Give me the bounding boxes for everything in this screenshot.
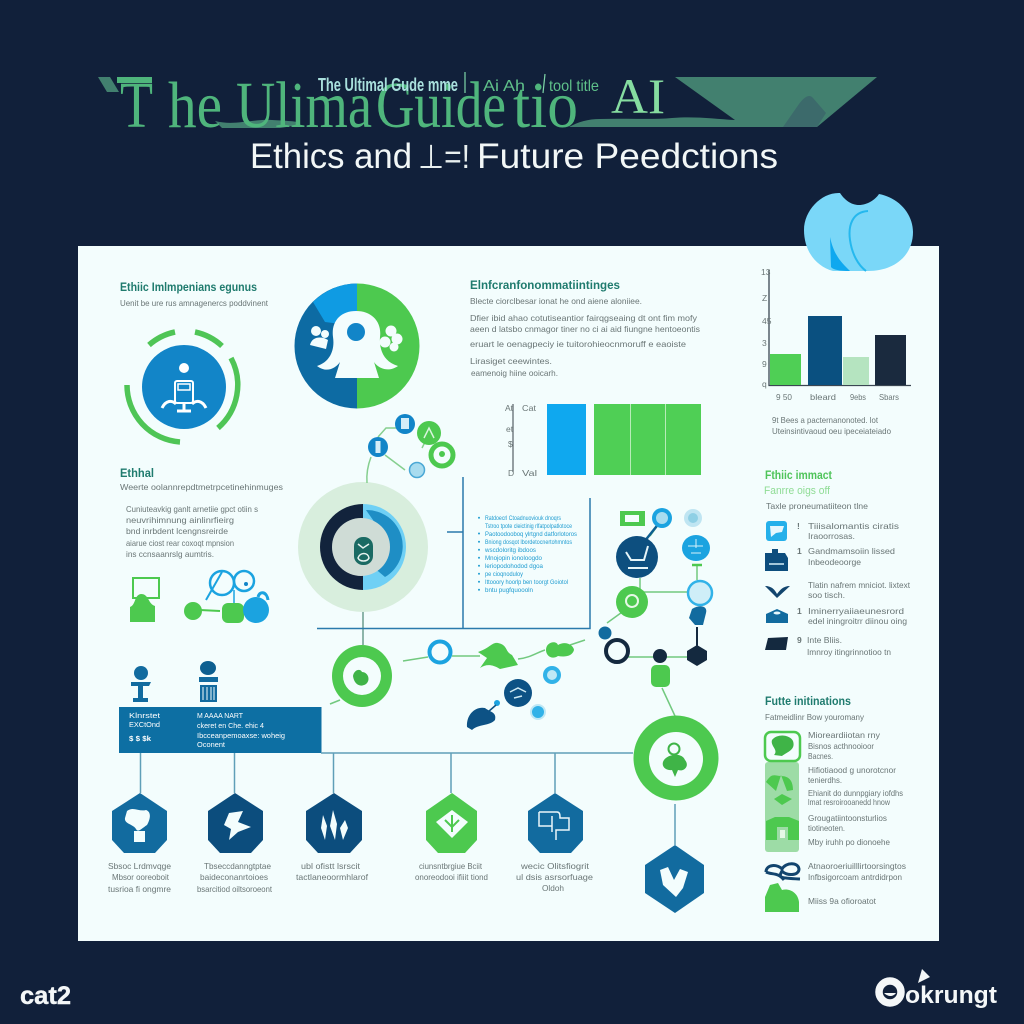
future text xyxy=(808,730,906,906)
icon: navy chevron xyxy=(765,586,790,598)
heading: Fthiic immact xyxy=(765,470,832,482)
icon xyxy=(224,811,251,840)
caption: Tbseccdanngtptae xyxy=(204,861,271,871)
impact text xyxy=(807,521,911,657)
future text: Ehianit do dunnpgiary iofdhs xyxy=(808,788,903,798)
future text: Atnaoroeriuilllirtoorsingtos xyxy=(808,861,906,871)
caption: baideconanrtoioes xyxy=(200,872,268,882)
top nodes xyxy=(620,511,645,526)
bullet list: leriopodohodod dgoa xyxy=(485,564,544,570)
x axis labels: Sbars xyxy=(879,392,899,402)
future text: Mby iruhh po dionoehe xyxy=(808,837,890,847)
future text: tiotineoten. xyxy=(808,823,845,833)
green leaf blobs xyxy=(478,643,518,669)
caption: tusrioa fi ongmre xyxy=(108,884,171,894)
title baseline wave xyxy=(215,120,300,128)
impact text: Iraoorrosas. xyxy=(808,531,855,541)
target donut chart xyxy=(298,482,428,612)
y axis labels: 9 xyxy=(762,359,767,369)
impact text: Tiiisalomantis ciratis xyxy=(808,521,899,531)
caption: bsarcitiod oiltsoroeont xyxy=(197,884,273,894)
y axis labels: 13 xyxy=(761,267,771,277)
y axis labels: q xyxy=(762,379,767,389)
numbers: 1 xyxy=(797,546,802,556)
future text: Infbsigorcoam antrdidrpon xyxy=(808,872,902,882)
caption xyxy=(108,861,171,894)
axes xyxy=(769,270,911,386)
caption: Oldoh xyxy=(542,883,564,893)
callout box: Ibcceanpemoaxse: woheig xyxy=(197,731,285,740)
block bar chart xyxy=(505,403,701,478)
pie chart xyxy=(295,284,420,408)
icon xyxy=(539,812,569,840)
impact text: soo tisch. xyxy=(808,590,845,600)
callout box: EXCtOnd xyxy=(129,720,160,729)
paragraph xyxy=(126,504,258,559)
small overlay title: The Ultimal Gude mme xyxy=(318,75,458,95)
subheading: Fatmeidlinr Bow youromany xyxy=(765,712,865,722)
x axis labels: bleard xyxy=(810,392,836,402)
main panel xyxy=(78,246,939,941)
axis labels: et xyxy=(506,424,514,434)
network: top nodes xyxy=(368,414,453,478)
callout box: Klnrstet xyxy=(129,711,161,720)
green ring node xyxy=(330,645,392,707)
network: right node cluster xyxy=(598,508,712,716)
heading: Futte initinations xyxy=(765,696,851,708)
hex card 3 xyxy=(296,793,369,882)
title mountain xyxy=(783,96,826,127)
section: ethic impact xyxy=(764,470,911,657)
section: future initiations xyxy=(765,696,906,912)
icon stack xyxy=(765,732,800,852)
future text: Grougatiintoonsturlios xyxy=(808,813,887,823)
paragraph: eruart le oenagpeciy ie tuitorohieocnmoruff e eaoiste xyxy=(470,339,686,349)
future text: Hifiotiaood g unorotcnor xyxy=(808,765,896,775)
impact text: edel iningroitrr diinou oing xyxy=(808,616,907,626)
subtitle: Ethics and xyxy=(250,137,412,176)
icon: green person in frame xyxy=(130,578,159,622)
impact text: Gandmamsoiin lissed xyxy=(808,546,895,556)
icon: blue tile xyxy=(766,521,787,541)
pie icon people xyxy=(310,326,329,349)
numbers: 1 xyxy=(797,606,802,616)
subheading: Uenit be ure rus amnagenercs poddvinent xyxy=(120,298,269,308)
main title: Ulima xyxy=(236,69,372,142)
icon: green blob xyxy=(765,883,799,912)
section: ethical xyxy=(120,468,283,559)
callout box xyxy=(119,707,322,753)
blue blob decoration xyxy=(804,193,913,271)
subheading: Weerte oolannrepdtmetrpcetinehinmuges xyxy=(120,482,283,492)
subtitle: Future Peedctions xyxy=(477,137,778,176)
caption: ul dsis asrsorfuage xyxy=(516,872,593,882)
impact text: Imnroy itingrinnotioo tn xyxy=(807,647,891,657)
paragraph: ins ccnsaanrslg aumtris. xyxy=(126,549,214,559)
caption xyxy=(415,861,488,882)
paragraph: aiarue ciost rear coxoqt mpnsion xyxy=(126,538,234,548)
bullet list: bntu pugfquoooln xyxy=(485,588,533,594)
paragraph: aeen d latsbo cnmagor tiner no ci ai aid fiungne hentoeontis xyxy=(470,324,700,334)
axis labels: Val xyxy=(522,468,537,478)
future text: Bisnos acthnooioor xyxy=(808,741,874,751)
chart caption xyxy=(772,415,891,436)
future text: tenierdhs. xyxy=(808,775,842,785)
logo: right: okrungt xyxy=(905,982,997,1009)
description: Taxle proneumatiiteon tlne xyxy=(766,501,868,511)
donut shield icon xyxy=(354,537,373,565)
callout box: $ $ $k xyxy=(129,734,152,743)
caption: tactlaneoormhlarof xyxy=(296,872,369,882)
bullet list: Mnojopin ionoloogdo xyxy=(485,556,543,562)
caption xyxy=(197,861,273,894)
intro line: Blecte ciorclbesar ionat he ond aiene aloniiee. xyxy=(470,296,642,306)
hex card 6 xyxy=(645,845,704,913)
green node xyxy=(616,586,648,618)
chart caption: 9t Bees a pacternanonoted. lot xyxy=(772,415,879,425)
chart caption: Uteinsintivaoud oeu ipeceiateiado xyxy=(772,426,891,436)
pie icon clover xyxy=(380,326,402,352)
blue blobs xyxy=(543,666,561,684)
bullet list: Tstroo tpote cleictinig rlfatpolpatlotoce xyxy=(485,524,573,530)
paragraph: Cuniuteavkig ganlt arnetiie gpct otiin s xyxy=(126,504,258,514)
icon: dark bar xyxy=(765,637,788,650)
numbers xyxy=(797,521,802,645)
icon xyxy=(125,809,150,842)
axis labels xyxy=(505,403,537,478)
icon: navy printer xyxy=(765,549,788,571)
icon: pedestals xyxy=(131,661,218,702)
title backdrop shape xyxy=(569,77,877,127)
overlay title tag one: Ai Ah xyxy=(483,78,525,95)
caption: ciunsntbrgiue Bciit xyxy=(419,861,483,871)
future text: Miiss 9a ofioroatot xyxy=(808,896,877,906)
logo: left: cat2 xyxy=(20,982,71,1010)
icon xyxy=(436,810,468,838)
x axis labels: 9 50 xyxy=(776,392,792,402)
section: information heading and text xyxy=(470,280,700,378)
heading: Ethiic Imlmpenians egunus xyxy=(120,282,257,294)
connector vine xyxy=(403,640,585,661)
hex card 5 xyxy=(516,793,593,893)
x axis labels xyxy=(776,392,899,402)
impact text: Tlatin nafrem mniciot. lixtext xyxy=(808,580,911,590)
caption xyxy=(296,861,369,882)
bullet list: Bniong dosqot lbordetocnertohmntos xyxy=(485,540,572,546)
impact text: Iminerryaiiaeunesrord xyxy=(808,606,904,616)
paragraph: eamenoig hiine ooicarh. xyxy=(471,368,558,378)
y axis labels: 45 xyxy=(762,316,772,326)
title corner mark xyxy=(98,77,119,92)
heading: Elnfcranfonommatiintinges xyxy=(470,280,620,292)
paragraph: Lirasiget ceewintes. xyxy=(470,356,552,366)
numbers: 9 xyxy=(797,635,802,645)
paragraph xyxy=(470,313,700,378)
future text: lmat resroirooanedd hnow xyxy=(808,797,891,807)
timeline lines xyxy=(140,753,675,845)
y axis labels xyxy=(761,267,772,389)
pie central figure xyxy=(317,311,398,378)
paragraph: Dfier ibid ahao cotutiseantior fairqgseaing dt ont fim mofy xyxy=(470,313,698,323)
callout box: M AAAA NART xyxy=(197,711,243,720)
subheading green: Fanrre oigs off xyxy=(764,485,831,497)
overlay title dividers xyxy=(465,72,545,93)
connector lines around donut xyxy=(317,457,590,645)
icon: navy knot xyxy=(766,864,800,880)
caption: ubl ofistt lsrscit xyxy=(301,861,361,871)
y axis labels: Z xyxy=(762,293,767,303)
axis labels: At xyxy=(505,403,514,413)
future text: Bacnes. xyxy=(808,751,833,761)
icon xyxy=(660,867,688,897)
bullet list xyxy=(478,516,577,594)
overlay title tag two: tool title xyxy=(549,78,599,95)
impact text: Inte Bliis. xyxy=(807,635,842,645)
bullet list: pe cioqnoduloy xyxy=(485,572,523,578)
subtitle glitch glyph: ⊥=! xyxy=(418,138,470,175)
axis labels: Cat xyxy=(522,403,537,413)
blue bar xyxy=(547,404,586,475)
main title xyxy=(120,69,578,142)
section: ethical implications xyxy=(120,282,269,308)
hex card 4 xyxy=(415,793,488,882)
bullet list: Paotoodooboq ylrtgnd datforlotoros xyxy=(485,532,577,538)
column bar chart xyxy=(761,267,911,436)
subtitle xyxy=(250,137,778,176)
numbers: ! xyxy=(797,521,800,531)
paragraph: bnd inrbdent lcengnsreirde xyxy=(126,526,228,536)
caption xyxy=(516,861,593,893)
caption: Mbsor ooreoboit xyxy=(112,872,170,882)
icon: linked chain nodes xyxy=(184,571,269,623)
bullet list: wscdoloritg ibdoos xyxy=(484,548,536,554)
logo: right xyxy=(879,969,997,1009)
connector lines xyxy=(607,525,697,716)
heading: Ethhal xyxy=(120,468,154,480)
caption: wecic Olitsfiogrit xyxy=(520,861,590,871)
main title: T xyxy=(120,69,153,142)
bars xyxy=(770,316,906,385)
hex card 1 xyxy=(108,793,171,894)
network: lower nodes xyxy=(403,640,585,730)
title top bar xyxy=(117,77,152,83)
icon xyxy=(321,810,348,840)
y axis labels: 3 xyxy=(762,338,767,348)
hex card 2 xyxy=(197,793,273,894)
bullet list: Ittooory hoorlp ben toorgt Goiotol xyxy=(485,580,568,586)
bullet list: Ratdoecrl Ctoadnuoviouk dnoqrs xyxy=(485,516,561,522)
small dark nodes xyxy=(598,626,612,640)
icon: robot ring xyxy=(127,332,238,442)
chart axis xyxy=(512,404,514,472)
main title: Guide xyxy=(376,69,506,142)
main title: tio xyxy=(513,69,578,142)
icon: blue dome xyxy=(766,609,788,623)
navy face node xyxy=(616,536,658,578)
AI title word: AI xyxy=(611,68,665,124)
light blue node xyxy=(688,581,712,605)
callout box: ckeret en Che. ehic 4 xyxy=(197,721,264,730)
future text: Mioreardiiotan rny xyxy=(808,730,881,740)
axis labels: $ xyxy=(508,439,513,449)
caption: onoreodooi ifiiit tiond xyxy=(415,872,488,882)
brain node xyxy=(682,535,710,561)
title banner xyxy=(98,68,877,142)
axis labels: D xyxy=(508,468,514,478)
caption: Sbsoc Lrdmvqge xyxy=(108,861,171,871)
x axis labels: 9ebs xyxy=(850,392,866,402)
paragraph: neuvrihimnung ainlinrfieirg xyxy=(126,515,234,525)
large green ring node xyxy=(634,716,718,800)
impact text: Inbeodeoorge xyxy=(808,557,861,567)
callout box: Oconent xyxy=(197,740,226,749)
main title: he xyxy=(168,69,222,142)
green bars xyxy=(594,404,701,475)
